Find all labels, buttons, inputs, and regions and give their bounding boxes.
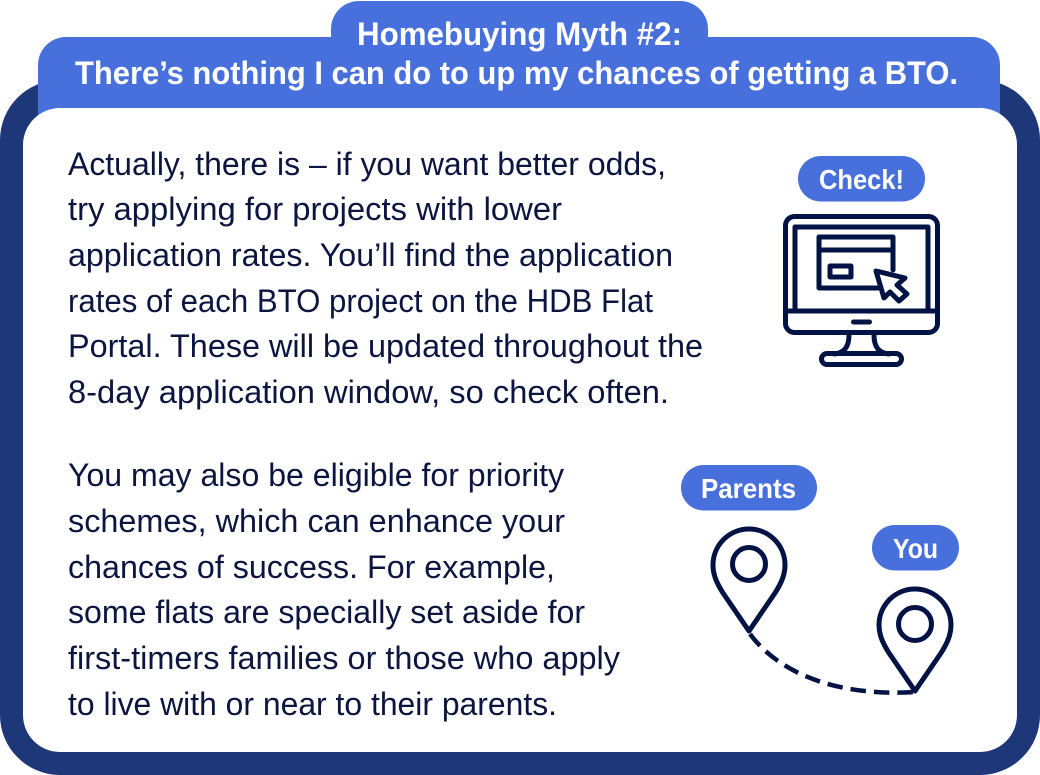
pill: Parents <box>681 465 817 510</box>
header tab shape <box>38 1 1000 125</box>
white content panel <box>23 108 1017 752</box>
pill: Parents: Parents <box>701 473 796 504</box>
paragraph 1: try applying for projects with lower <box>68 191 562 227</box>
icon: you location pin <box>879 589 951 691</box>
paragraph 2: You may also be eligible for priority <box>68 457 564 493</box>
pill: Check! <box>798 156 925 202</box>
paragraph 1: rates of each BTO project on the HDB Flat <box>68 283 653 319</box>
paragraph 2: chances of success. For example, <box>68 549 555 585</box>
paragraph 2: first-timers families or those who apply <box>68 640 620 676</box>
paragraph 2: some flats are specially set aside for <box>68 594 585 630</box>
paragraph 2: to live with or near to their parents. <box>68 686 557 722</box>
header tab <box>38 1 1000 125</box>
paragraph 1: application rates. You’ll find the application <box>68 237 673 273</box>
dashed route between pins <box>750 634 915 693</box>
icon: computer monitor with cursor <box>786 216 938 364</box>
paragraph 1: Actually, there is – if you want better odds, <box>68 146 666 182</box>
pill: You: You <box>893 533 938 564</box>
paragraph 2 <box>68 457 620 722</box>
paragraph 1 <box>68 146 703 410</box>
icon: parents location pin <box>713 529 785 631</box>
pill: Check!: Check! <box>819 164 904 195</box>
paragraph 1: 8-day application window, so check often. <box>68 374 669 410</box>
pill: You <box>872 525 959 570</box>
heading line 2: There’s nothing I can do to up my chances of getting a BTO. <box>75 55 958 91</box>
paragraph 2: schemes, which can enhance your <box>68 503 565 539</box>
paragraph 1: Portal. These will be updated throughout the <box>68 328 703 364</box>
heading line 1: Homebuying Myth #2: <box>357 16 682 52</box>
